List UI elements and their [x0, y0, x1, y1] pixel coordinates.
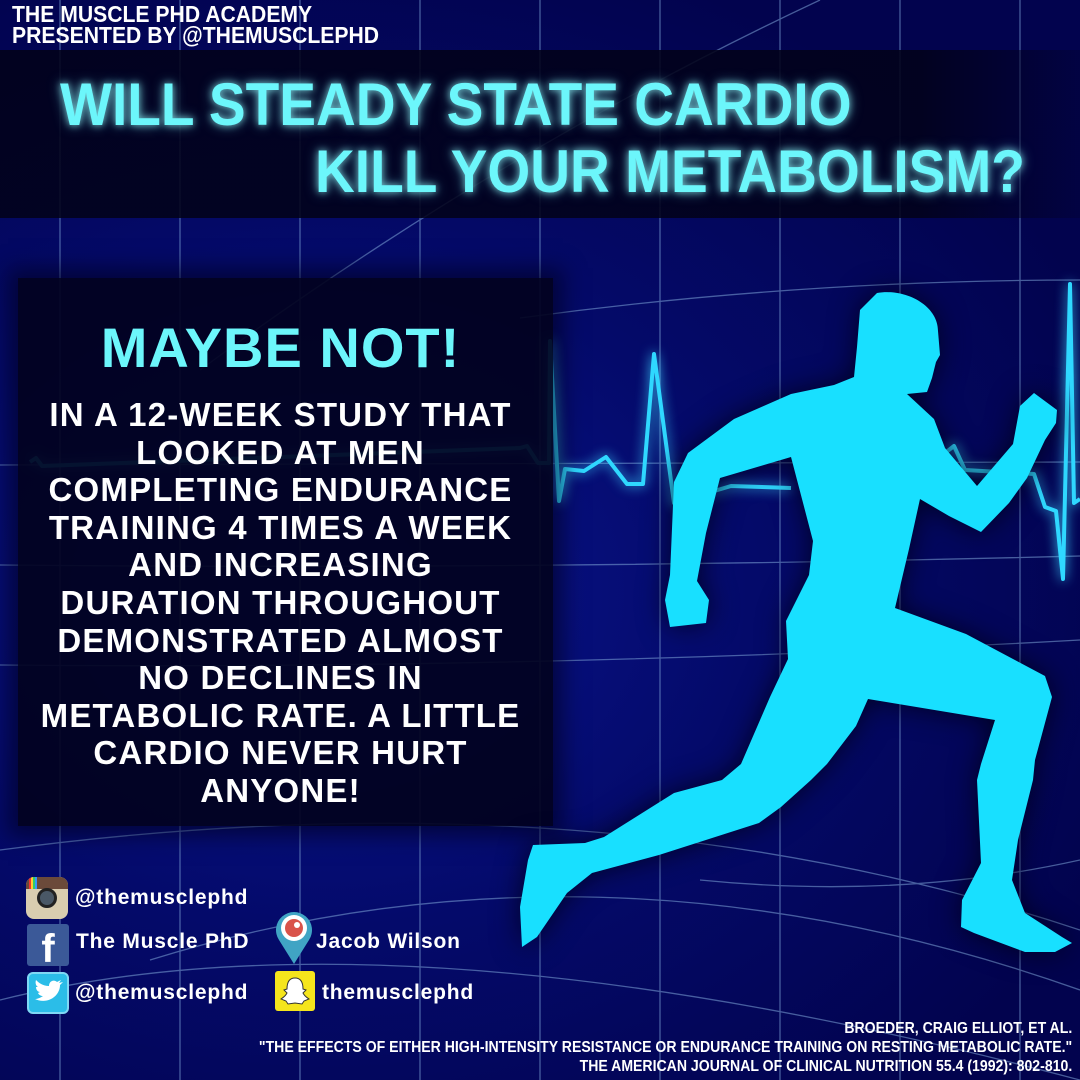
title panel	[0, 50, 1080, 218]
text panel	[18, 278, 553, 826]
citation: BROEDER, CRAIG ELLIOT, ET AL.	[844, 1020, 1072, 1037]
body text: ANYONE!	[200, 772, 361, 809]
handle: periscope: Jacob Wilson	[316, 930, 461, 953]
handle: snapchat: themusclephd	[322, 981, 474, 1004]
body text: NO DECLINES IN	[138, 659, 423, 696]
heading: maybe not: MAYBE NOT!	[101, 316, 460, 379]
body text: COMPLETING ENDURANCE	[48, 471, 512, 508]
handle: twitter: @themusclephd	[75, 981, 248, 1004]
body text: AND INCREASING	[128, 546, 433, 583]
body text: DEMONSTRATED ALMOST	[57, 622, 504, 659]
header: academy: THE MUSCLE PHD ACADEMY	[12, 1, 312, 27]
social: periscope	[276, 912, 312, 964]
title: KILL YOUR METABOLISM?	[315, 138, 1025, 205]
body text: DURATION THROUGHOUT	[60, 584, 501, 621]
body text: METABOLIC RATE. A LITTLE	[41, 697, 520, 734]
header: academy	[12, 1, 379, 48]
title	[53, 71, 1030, 205]
social: snapchat	[275, 971, 315, 1011]
citation: "THE EFFECTS OF EITHER HIGH-INTENSITY RESISTANCE OR ENDURANCE TRAINING ON RESTING METABOLIC RATE."	[259, 1039, 1072, 1056]
title: WILL STEADY STATE CARDIO	[60, 71, 852, 138]
body text: TRAINING 4 TIMES A WEEK	[49, 509, 512, 546]
social: twitter	[27, 972, 69, 1014]
body text: IN A 12-WEEK STUDY THAT	[49, 396, 512, 433]
body text: CARDIO NEVER HURT	[93, 734, 468, 771]
handle: instagram: @themusclephd	[75, 886, 248, 909]
social: instagram	[26, 877, 68, 919]
social: facebook	[27, 924, 69, 966]
citation: THE AMERICAN JOURNAL OF CLINICAL NUTRITION 55.4 (1992): 802-810.	[579, 1058, 1072, 1075]
citation	[259, 1020, 1072, 1075]
handle: facebook: The Muscle PhD	[76, 930, 249, 953]
header: academy: PRESENTED BY @THEMUSCLEPHD	[12, 22, 379, 48]
body text: LOOKED AT MEN	[136, 434, 425, 471]
body text	[41, 396, 520, 809]
